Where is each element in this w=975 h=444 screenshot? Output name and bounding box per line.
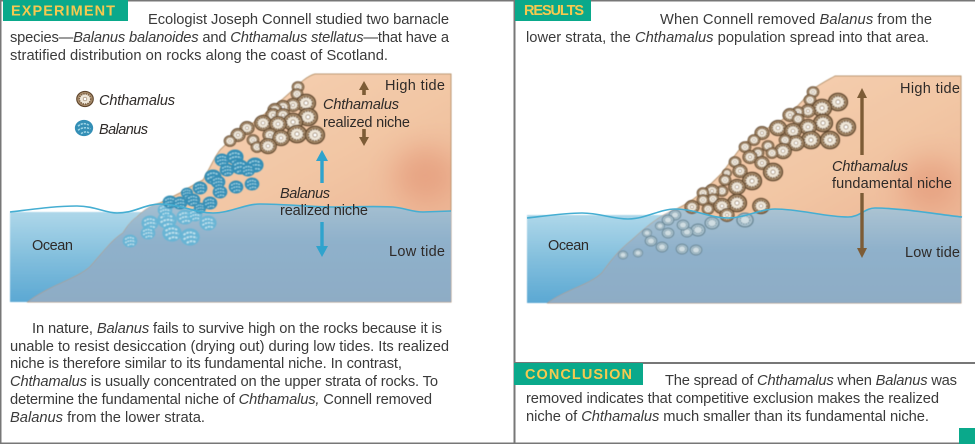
water line [527,208,962,219]
Balanus cluster [123,149,264,247]
tide and ocean labels: Low tide [905,245,960,261]
legend: Chthamalus [99,93,175,109]
results heading tag [515,0,591,21]
experiment heading tag: EXPERIMENT [11,4,115,20]
legend: Balanus [99,122,148,138]
ocean and rock scene [527,76,961,303]
panel: experiment [3,0,457,426]
tide and ocean labels: Ocean [548,238,589,254]
experiment explanation text: unable to resist desiccation (drying out) during low tides. Its realized [10,339,449,355]
legend [75,91,175,138]
tide and ocean labels [548,81,960,261]
Chthamalus realized niche label and arrows: realized niche [323,115,410,131]
experiment intro text: species—Balanus balanoides and Chthamalus stellatus—that have a [10,30,449,46]
experiment explanation text: Balanus from the lower strata. [10,410,205,426]
Chthamalus fundamental niche label and arrows [832,88,952,258]
Chthamalus realized niche label and arrows [323,81,410,146]
experiment intro text: Ecologist Joseph Connell studied two barnacle [148,12,449,28]
Chthamalus fundamental niche label and arrows: Chthamalus [832,159,908,175]
panel: results [515,0,962,303]
conclusion heading tag: CONCLUSION [525,367,632,383]
experiment intro text: stratified distribution on rocks along the coast of Scotland. [10,48,388,64]
corner marker [959,428,975,444]
experiment explanation text: determine the fundamental niche of Chthamalus, Connell removed [10,392,432,408]
experiment explanation text: In nature, Balanus fails to survive high on the rocks because it is [32,321,442,337]
conclusion text: niche of Chthamalus much smaller than its fundamental niche. [526,409,929,425]
results text: lower strata, the Chthamalus population spread into that area. [526,30,929,46]
Chthamalus realized niche label and arrows: Chthamalus [323,97,399,113]
panel: conclusion [514,363,975,444]
Balanus realized niche label and arrows [280,150,368,257]
tide and ocean labels: High tide [385,78,445,94]
Chthamalus cluster [224,82,324,154]
diagram: barnacles in nature [10,74,457,302]
results heading tag: RESULTS [524,3,584,19]
tide and ocean labels: Ocean [32,238,73,254]
experiment explanation text: Chthamalus is usually concentrated on the upper strata of rocks. To [10,374,438,390]
Chthamalus fundamental niche label and arrows: fundamental niche [832,176,952,192]
Chthamalus spread [618,87,855,259]
Balanus realized niche label and arrows: realized niche [280,203,368,219]
results text: When Connell removed Balanus from the [660,12,932,28]
tide and ocean labels [32,78,445,260]
experiment explanation text: niche is therefore similar to its fundamental niche. In contrast, [10,356,402,372]
tide and ocean labels: Low tide [389,244,445,260]
conclusion text: removed indicates that competitive exclusion makes the realized [526,391,939,407]
diagram: Balanus removed [527,76,962,303]
water line [10,204,451,213]
ocean and rock scene [10,74,457,302]
experiment heading tag [3,0,128,21]
Balanus realized niche label and arrows: Balanus [280,186,330,202]
conclusion text: The spread of Chthamalus when Balanus was [665,373,957,389]
conclusion heading tag [514,363,643,385]
tide and ocean labels: High tide [900,81,960,97]
